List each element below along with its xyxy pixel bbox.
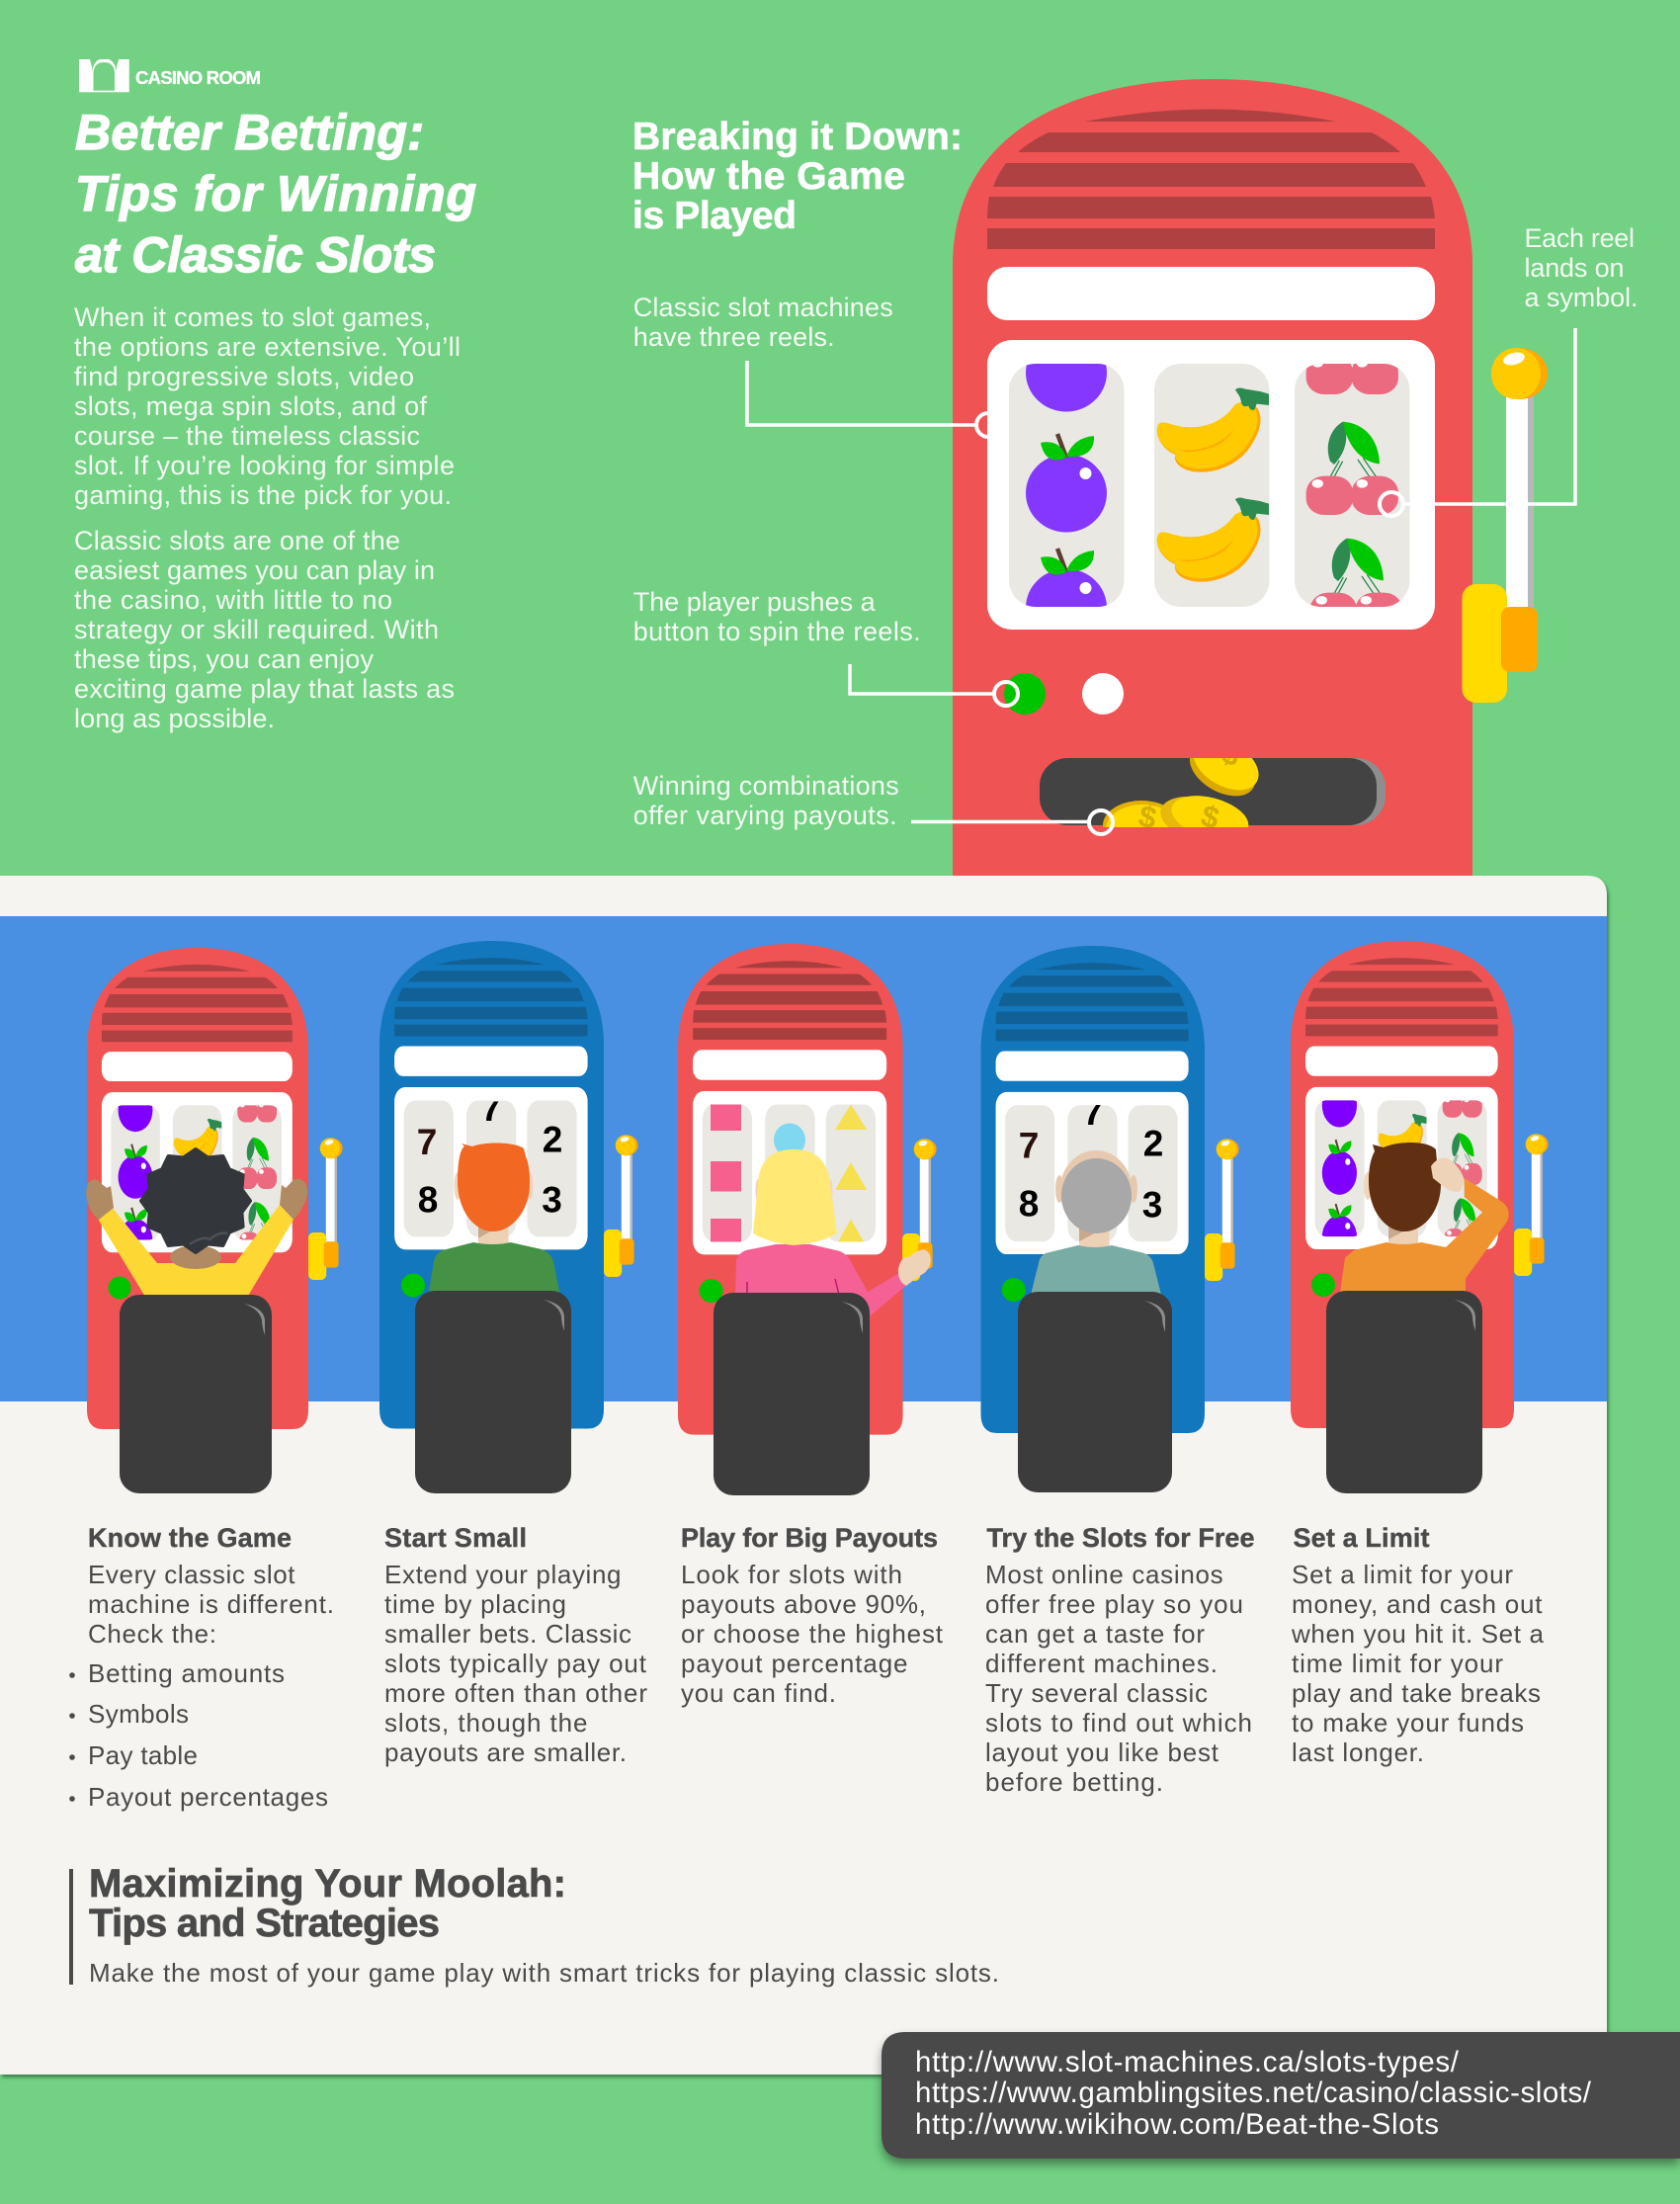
lever [902, 1139, 937, 1281]
reel numbers [1020, 1105, 1162, 1218]
sources box: http://www.wikihow.com/Beat-the-Slots [915, 2108, 1439, 2141]
title: at Classic Slots [75, 227, 436, 283]
heading: breaking it down: is Played [632, 195, 797, 237]
illustration: know the game [86, 948, 343, 1493]
bullet list [69, 1658, 328, 1812]
lever [1205, 1139, 1239, 1281]
logo: Casino Room: CASINO ROOM [135, 67, 261, 88]
tip: set a limit [1291, 1523, 1545, 1767]
reel symbols [1026, 313, 1402, 646]
reel numbers: 7 [1019, 1125, 1039, 1166]
chair [714, 1293, 870, 1495]
reel numbers [418, 1101, 561, 1213]
callout: spin button: button to spin the reels. [633, 617, 921, 646]
callout: three reels: Classic slot machines [633, 293, 893, 322]
intro paragraph one [74, 302, 461, 510]
tip: try the slots for free: Try the Slots for Free [986, 1523, 1255, 1553]
reel symbols [119, 1077, 279, 1262]
tip: start small: payouts are smaller. [384, 1738, 627, 1767]
tip: play for big payouts: Look for slots with [681, 1560, 902, 1589]
tip: start small [384, 1523, 647, 1767]
sources box: http://www.slot-machines.ca/slots-types/ [915, 2046, 1460, 2078]
machine [87, 948, 308, 1429]
coin tray: $ [1198, 798, 1222, 836]
tip: know the game [69, 1523, 334, 1812]
lever [1463, 348, 1548, 703]
tip: try the slots for free: before betting. [985, 1767, 1163, 1797]
player with arms raised [86, 1149, 307, 1297]
tip: play for big payouts: Play for Big Payouts [681, 1523, 938, 1553]
chair [1326, 1291, 1482, 1493]
machine [678, 944, 903, 1435]
intro paragraph two [74, 526, 455, 733]
spin button [1004, 673, 1046, 715]
tip: set a limit: Set a Limit [1293, 1523, 1429, 1553]
callout: each reel [1380, 223, 1638, 516]
callout: three reels [633, 293, 1000, 437]
intro paragraph one: gaming, this is the pick for you. [74, 480, 452, 510]
machine [1291, 941, 1514, 1428]
tip: set a limit: to make your funds [1292, 1708, 1524, 1738]
title: Better Betting: [75, 105, 424, 160]
intro paragraph two: exciting game play that lasts as [74, 674, 455, 704]
reel numbers: 2 [1143, 1123, 1163, 1164]
intro paragraph two: these tips, you can enjoy [74, 644, 374, 674]
callout: three reels: have three reels. [633, 322, 835, 352]
illustration: play for big payouts [678, 944, 937, 1495]
section heading: maximizing your moolah [69, 1862, 999, 1988]
tip: start small: slots typically pay out [384, 1649, 647, 1678]
intro paragraph one: course – the timeless classic [74, 421, 420, 451]
intro paragraph one: When it comes to slot games, [74, 302, 431, 332]
tip: start small: time by placing [384, 1589, 566, 1619]
reel numbers: 7 [417, 1122, 437, 1162]
illustration: set a limit [1291, 941, 1549, 1493]
blue band [0, 916, 1607, 1401]
reel symbols [1322, 1072, 1483, 1259]
machine [980, 946, 1205, 1433]
illustration: start small [379, 941, 638, 1493]
lever [1514, 1134, 1549, 1276]
callout: each reel: Each reel [1524, 223, 1635, 253]
callout: payouts [633, 771, 1113, 834]
tip: set a limit: time limit for your [1292, 1649, 1503, 1678]
chair [1018, 1292, 1172, 1492]
coin tray: $ [1135, 799, 1159, 836]
intro paragraph one: find progressive slots, video [74, 362, 414, 391]
tip: start small: Start Small [384, 1523, 527, 1553]
chair [120, 1295, 272, 1493]
callout: payouts: Winning combinations [633, 771, 899, 801]
tip: try the slots for free: slots to find out which [985, 1708, 1252, 1738]
intro paragraph two: the casino, with little to no [74, 585, 392, 615]
tip: set a limit: play and take breaks [1292, 1678, 1541, 1708]
intro paragraph one: the options are extensive. You’ll [74, 332, 461, 362]
player with grey hair [1031, 1150, 1161, 1295]
tip: set a limit: last longer. [1292, 1738, 1424, 1767]
tip: start small: slots, though the [384, 1708, 587, 1738]
button [1002, 1278, 1026, 1302]
tip: know the game: Check the: [88, 1619, 216, 1649]
button [401, 1273, 425, 1297]
reel numbers: 3 [542, 1180, 562, 1220]
heading: breaking it down [632, 116, 963, 237]
tip: try the slots for free: can get a taste for [985, 1619, 1205, 1649]
chair [415, 1291, 571, 1493]
player scratching head [1340, 1143, 1509, 1295]
heading: breaking it down: Breaking it Down: [632, 116, 963, 158]
bullet list: Symbols [88, 1699, 189, 1729]
player with red hair [429, 1143, 560, 1295]
machine [379, 941, 604, 1429]
coin tray [1040, 758, 1386, 827]
callout: payouts: offer varying payouts. [633, 801, 897, 830]
tip: set a limit: money, and cash out [1292, 1589, 1543, 1619]
sources box [882, 2032, 1680, 2159]
tip: play for big payouts: payout percentage [681, 1649, 907, 1678]
tip: know the game: machine is different. [88, 1589, 334, 1619]
intro paragraph two: long as possible. [74, 704, 275, 733]
secondary button [1082, 673, 1124, 715]
panel: tips [0, 876, 1607, 2075]
callout: spin button [633, 587, 1018, 706]
heading: breaking it down: How the Game [632, 155, 905, 198]
tip: know the game: Know the Game [88, 1523, 292, 1553]
tip: set a limit: Set a limit for your [1292, 1560, 1513, 1589]
coin tray: $ [1216, 735, 1247, 774]
tip: try the slots for free [985, 1523, 1255, 1797]
button [700, 1279, 723, 1303]
machine body and reels [953, 79, 1472, 949]
reel numbers: 3 [1142, 1184, 1162, 1226]
tip: try the slots for free: offer free play so you [985, 1589, 1243, 1619]
reel numbers: 8 [418, 1180, 438, 1220]
callout: spin button: The player pushes a [633, 587, 877, 617]
callout: each reel: a symbol. [1524, 283, 1638, 312]
illustration: try the slots for free [980, 946, 1239, 1492]
tip: play for big payouts: payouts above 90%, [681, 1589, 926, 1619]
reel numbers: 7 [481, 1088, 501, 1129]
reel numbers: 8 [1019, 1184, 1039, 1224]
bullet list: Betting amounts [88, 1658, 285, 1688]
bullet list: Pay table [88, 1740, 198, 1770]
callout: each reel: lands on [1524, 253, 1625, 283]
reel shapes [711, 1105, 867, 1248]
sources box: https://www.gamblingsites.net/casino/classic-slots/ [915, 2077, 1592, 2109]
title: Tips for Winning [75, 166, 476, 221]
button [1311, 1273, 1335, 1297]
tip: try the slots for free: different machines. [985, 1649, 1218, 1678]
intro paragraph one: slots, mega spin slots, and of [74, 391, 427, 421]
intro paragraph two: easiest games you can play in [74, 555, 435, 585]
tip: play for big payouts: or choose the highest [681, 1619, 944, 1649]
tip: start small: more often than other [384, 1678, 647, 1708]
section heading: maximizing your moolah: Tips and Strategies [89, 1902, 440, 1945]
tip: try the slots for free: Try several classic [985, 1678, 1208, 1708]
tip: start small: smaller bets. Classic [384, 1619, 631, 1649]
lever [604, 1135, 638, 1277]
intro paragraph two: Classic slots are one of the [74, 526, 400, 555]
tip: play for big payouts [681, 1523, 944, 1708]
reel numbers: 7 [1083, 1092, 1103, 1133]
intro paragraph two: strategy or skill required. With [74, 615, 439, 644]
intro paragraph one: slot. If you’re looking for simple [74, 451, 455, 480]
tip: play for big payouts: you can find. [681, 1678, 836, 1708]
button [109, 1277, 130, 1299]
large slot machine [953, 79, 1548, 949]
section heading: maximizing your moolah: Maximizing Your Moolah: [89, 1862, 566, 1906]
tip: set a limit: when you hit it. Set a [1291, 1619, 1545, 1649]
lever [308, 1138, 343, 1280]
bullet list: Payout percentages [88, 1782, 328, 1812]
logo: Casino Room [79, 59, 261, 92]
tip: try the slots for free: layout you like best [985, 1738, 1219, 1767]
reel numbers: 2 [543, 1119, 562, 1160]
section heading: maximizing your moolah: Make the most of your game play with smart tricks for playing classic slots. [89, 1958, 999, 1988]
tip: know the game: Every classic slot [88, 1560, 295, 1589]
title [75, 105, 476, 283]
tip: try the slots for free: Most online casinos [985, 1560, 1223, 1589]
player with blonde hair [735, 1149, 931, 1316]
tip: start small: Extend your playing [384, 1560, 621, 1589]
